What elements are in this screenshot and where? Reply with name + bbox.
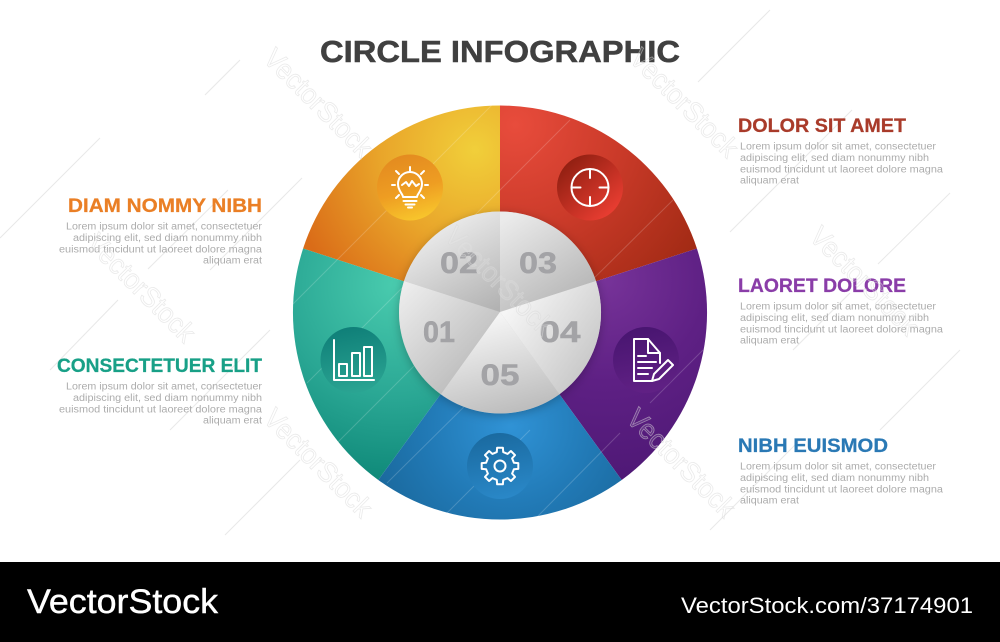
text block: nibh euismod: euismod tincidunt ut laoreet dolore magna: [740, 484, 943, 496]
text block: nibh euismod: aliquam erat: [740, 496, 799, 506]
watermarks: VectorStock: [258, 42, 379, 164]
number 02: 02: [440, 247, 478, 280]
segment: yellow 02: [303, 105, 500, 312]
text block: diam nommy nibh: DIAM NOMMY NIBH: [68, 196, 262, 217]
icon: document and pencil: [613, 327, 679, 393]
segment: teal 01: [293, 248, 500, 480]
text block: diam nommy nibh: [59, 196, 263, 266]
text block: diam nommy nibh: Lorem ipsum dolor sit amet, consectetuer: [66, 222, 263, 232]
text block: nibh euismod: NIBH EUISMOD: [738, 436, 888, 457]
text block: dolor sit amet: aliquam erat: [740, 176, 799, 186]
panel: circle diagram: [290, 100, 707, 523]
icon: gear: [467, 433, 533, 499]
text block: dolor sit amet: adipiscing elit, sed diam nonummy nibh: [740, 153, 929, 164]
footer url: VectorStock.com/37174901: [681, 593, 973, 618]
text block: dolor sit amet: [738, 116, 943, 186]
text block: nibh euismod: Lorem ipsum dolor sit amet, consectetuer: [740, 462, 937, 472]
text block: laoret dolore: Lorem ipsum dolor sit amet, consectetuer: [740, 302, 937, 312]
watermarks: [81, 42, 925, 524]
text block: consectetuer elit: adipiscing elit, sed diam nonummy nibh: [73, 393, 262, 404]
text block: dolor sit amet: Lorem ipsum dolor sit amet, consectetuer: [740, 142, 937, 152]
text block: diam nommy nibh: euismod tincidunt ut laoreet dolore magna: [59, 244, 262, 256]
footer logo: VectorStock: [27, 583, 219, 621]
text block: laoret dolore: euismod tincidunt ut laoreet dolore magna: [740, 324, 943, 336]
footer bar: [0, 562, 1000, 642]
segment: red 03: [500, 106, 697, 312]
text block: consectetuer elit: [57, 356, 263, 426]
wedge 04: [500, 281, 601, 394]
text block: laoret dolore: adipiscing elit, sed diam nonummy nibh: [740, 313, 929, 324]
title: CIRCLE INFOGRAPHIC: [320, 34, 680, 69]
segment: blue 05: [378, 312, 622, 520]
text block: dolor sit amet: DOLOR SIT AMET: [738, 116, 906, 137]
text block: consectetuer elit: euismod tincidunt ut laoreet dolore magna: [59, 404, 262, 416]
number 03: 03: [519, 247, 557, 280]
number 05: 05: [480, 359, 520, 392]
text block: dolor sit amet: euismod tincidunt ut laoreet dolore magna: [740, 164, 943, 176]
panel: inner grey circle: [399, 211, 601, 414]
text block: consectetuer elit: aliquam erat: [203, 416, 262, 426]
watermarks: VectorStock: [621, 402, 742, 524]
icon: target: [557, 154, 623, 220]
text block: diam nommy nibh: aliquam erat: [203, 256, 262, 266]
text block: nibh euismod: adipiscing elit, sed diam nonummy nibh: [740, 473, 929, 484]
number 04: 04: [540, 316, 581, 349]
number 01: 01: [423, 316, 455, 349]
watermarks: VectorStock: [258, 402, 379, 524]
text block: laoret dolore: aliquam erat: [740, 336, 799, 346]
text block: diam nommy nibh: adipiscing elit, sed diam nonummy nibh: [73, 233, 262, 244]
icon: lightbulb: [377, 154, 443, 220]
wedge 05: [441, 312, 560, 413]
text block: laoret dolore: LAORET DOLORE: [738, 276, 906, 297]
watermarks: VectorStock: [81, 227, 202, 349]
watermarks: VectorStock: [804, 220, 925, 342]
wedge 02: [404, 212, 500, 312]
wedge 03: [500, 211, 596, 312]
text block: consectetuer elit: Lorem ipsum dolor sit amet, consectetuer: [66, 382, 263, 392]
icon: bar chart: [320, 327, 386, 393]
text block: laoret dolore: [738, 276, 943, 346]
text block: nibh euismod: [738, 436, 943, 506]
text block: consectetuer elit: CONSECTETUER ELIT: [57, 356, 262, 377]
watermarks: VectorStock: [439, 220, 560, 342]
wedge 01: [399, 281, 500, 394]
segment: purple 04: [500, 248, 707, 480]
watermarks: VectorStock: [624, 42, 745, 164]
